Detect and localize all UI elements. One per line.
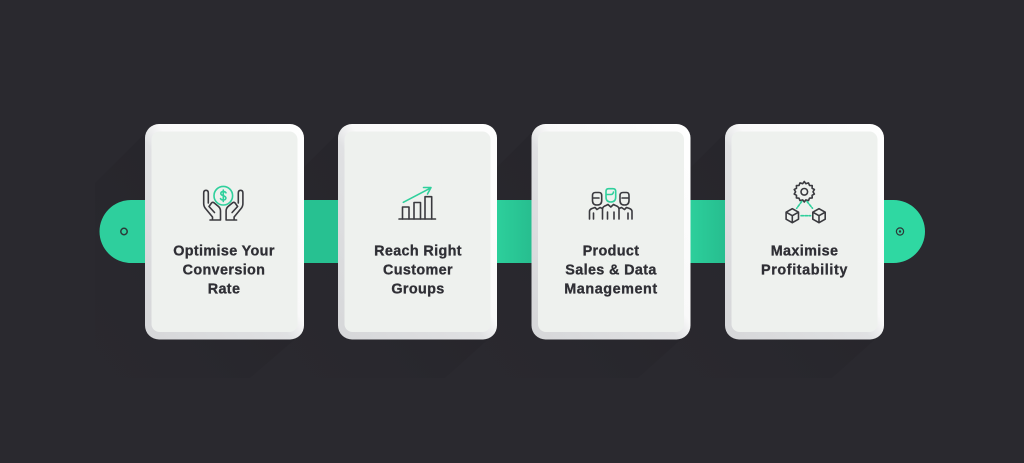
panel: maximise profitability [725,124,884,340]
panel: reach right customer groups [338,124,497,340]
heading: reach right customer groups: Customer [383,262,453,278]
icon: team of three people [590,189,632,219]
heading: product sales and data management: Management [564,282,658,298]
icon: gear and connected cubes [786,182,825,223]
heading: optimise your conversion rate: Conversion [183,262,265,278]
heading: product sales and data management: Product [583,244,639,260]
start node [121,228,127,235]
icon: hands holding coin [204,186,243,220]
heading: reach right customer groups: Reach Right [374,244,462,260]
heading: product sales and data management: Sales & Data [565,262,657,278]
panel: product sales and data management [532,124,690,340]
card long shadows [95,128,880,378]
heading: reach right customer groups: Groups [391,282,445,298]
heading: maximise profitability: Maximise [771,244,838,260]
heading: optimise your conversion rate: Optimise Your [173,244,275,260]
icon: rising bar chart [399,188,436,219]
heading: maximise profitability: Profitability [761,262,848,278]
green connector band [100,200,925,263]
panel: optimise conversion rate [145,124,304,340]
end node [896,228,904,235]
heading: optimise your conversion rate: Rate [208,282,240,298]
